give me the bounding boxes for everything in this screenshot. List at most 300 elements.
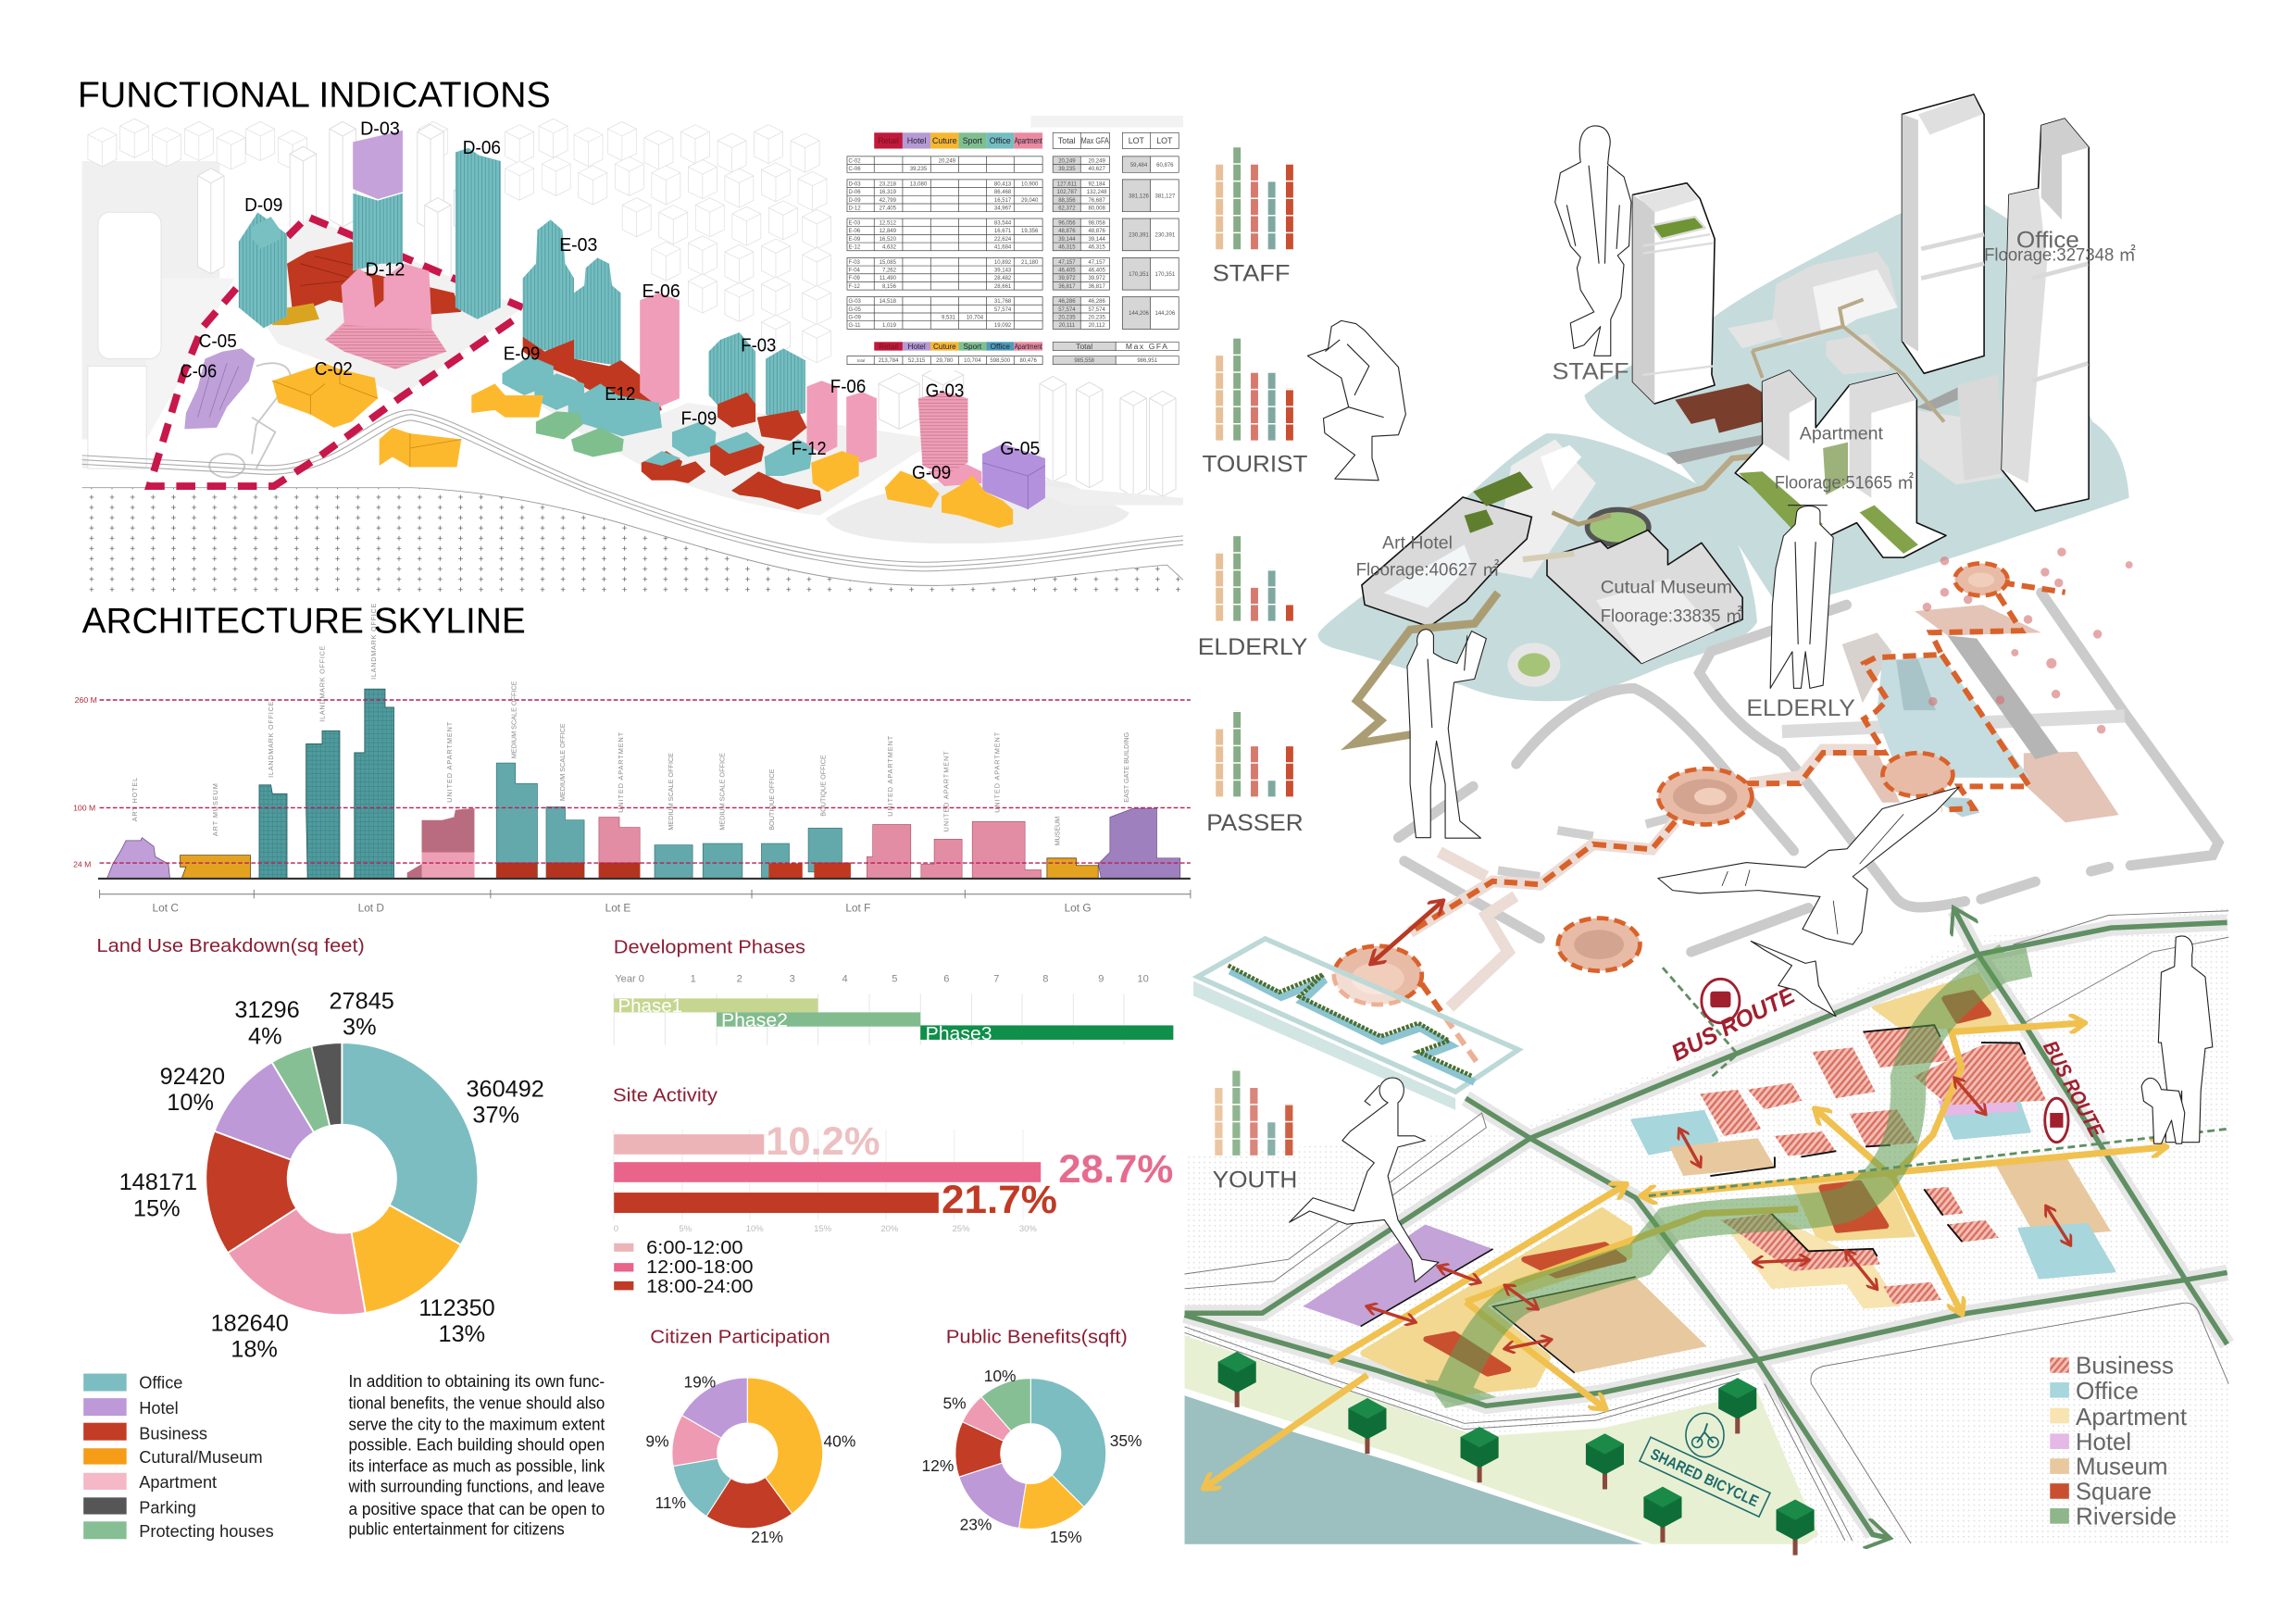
table values: 39,972 [1088,276,1105,281]
massing lot C [184,348,461,468]
legend: land use: Parking [139,1499,196,1518]
table values: D-09 [849,198,861,204]
table values: 23,218 [880,181,897,187]
table values: 19,092 [994,323,1012,329]
heading: land use: Land Use Breakdown(sq feet) [96,935,365,956]
height labels: 100 M [73,803,95,812]
massing lot F [642,332,877,509]
donut chart: citizen participation [672,1378,823,1529]
legend: site plan: Riverside [2076,1502,2177,1530]
table totals: 80,476 [1019,358,1037,364]
year axis labels: 3 [790,973,795,984]
table values: 46,286 [1058,299,1076,305]
dashed bus line [1649,968,2227,1196]
table values: 27,405 [880,206,897,211]
building type vertical labels: BOUTIQUE OFFICE [767,768,776,831]
table totals: Sport [964,343,982,351]
year axis labels: 4 [842,973,848,984]
building: art hotel [1362,439,1596,627]
table values: 10,704 [967,315,984,320]
public benefit percentages: 35% [1110,1431,1142,1450]
panel: development phases [614,937,1173,1044]
table totals: 10,704 [964,358,981,364]
table totals: Apartment [1015,343,1042,351]
gantt bars [614,993,1173,1044]
building code labels: F-12 [792,438,827,459]
green flow arrow [1425,948,2032,1408]
donut values: 31296 [234,997,300,1023]
building type vertical labels: MEDIUM SCALE OFFICE [667,753,675,831]
building code labels: E12 [605,383,635,405]
table values: 48,876 [1088,229,1105,234]
building type vertical labels: MEDIUM SCALE OFFICE [510,681,518,758]
table totals: 29,780 [936,358,954,364]
donut values: 18% [231,1336,278,1362]
building type vertical labels: ILANDMARK OFFICE [267,701,275,778]
table values: 20,249 [1088,158,1105,164]
route nodes [1334,563,2007,1005]
year axis labels: 9 [1098,973,1104,984]
legend: site plan: Hotel [2076,1428,2131,1455]
bar chart: activity by time: 10.2% [766,1119,880,1164]
table values: F-03 [849,260,861,266]
plots: yellow plaza [1364,1211,1628,1393]
legend: site plan: Business [2076,1352,2174,1380]
gantt bars: Phase3 [926,1023,992,1044]
annotations: building floorage labels: Apartment [1800,424,1884,443]
building type vertical labels: UNITED APARTMENT [942,751,950,831]
donut values: 10% [167,1090,214,1116]
table values: 59,484 [1130,163,1148,169]
red activity dots [1923,548,2133,733]
legend: site plan: Museum [2076,1453,2168,1480]
table values: 92,184 [1088,181,1105,187]
building type vertical labels: MEDIUM SCALE OFFICE [718,753,726,831]
bar chart: activity by time: 28.7% [1058,1147,1173,1192]
building code labels: E-03 [559,234,597,256]
text block: venue description [348,1372,605,1539]
bar chart: activity by time: 15% [814,1224,832,1234]
building type vertical labels: ILANDMARK OFFICE [369,603,378,680]
table values: 12,849 [880,229,897,234]
label: elderly: ELDERLY [1198,634,1308,660]
city context buildings [88,119,1176,496]
table values: E-03 [849,220,861,226]
building type vertical labels: UNITED APARTMENT [445,721,454,803]
table totals: 598,500 [990,358,1011,364]
heading: site activity: Site Activity [613,1084,718,1106]
table values: 46,405 [1088,269,1105,274]
text block: venue description: its interface as much as possible, link [348,1457,605,1476]
table values: C-06 [849,167,861,172]
bus route label and sign: BUS ROUTE [1667,982,1800,1067]
table values: 102,787 [1057,190,1078,195]
grey streets [1398,593,2218,952]
table values: 127,611 [1057,181,1078,187]
table totals: total [857,358,865,363]
table values: 230,391 [1154,232,1176,238]
panel: citizen participation [645,1326,855,1546]
annotations: building floorage labels [1356,227,2136,721]
legend: time slots: 18:00-24:00 [646,1276,754,1297]
figure: staff man [1555,126,1631,356]
figure: runner [1290,1078,1439,1282]
table values: 20,249 [939,158,956,164]
table values: F-09 [849,276,861,281]
table totals: Office [991,343,1010,351]
table totals [847,342,1179,365]
table values: 86,468 [994,190,1012,195]
table header row: Apartment [1015,136,1042,145]
donut values [119,989,544,1362]
lot labels: Lot D [358,902,384,915]
table values: 381,126 [1129,194,1150,200]
legend: land use: Hotel [139,1399,179,1418]
donut values: 148171 [119,1169,197,1195]
site boundary dashed line [149,217,523,486]
public benefit percentages: 23% [960,1515,992,1533]
table header row: Sport [963,136,982,145]
courtyard complex [1842,605,2119,822]
legend: land use: Business [139,1425,207,1443]
building code labels: D-12 [366,258,405,280]
table values: 80,008 [1088,206,1105,211]
tower: east office tower [2002,119,2089,511]
legend: time slots: 6:00-12:00 [646,1237,743,1258]
table values: 20,249 [1058,158,1076,164]
park strip [1185,1335,1818,1544]
table totals: Max GFA [1126,342,1169,351]
building code labels: E-09 [504,343,540,364]
bar chart: activity by time: 20% [880,1224,899,1234]
donut values: 37% [472,1102,519,1128]
dashed orange route [1398,580,2065,1065]
table values: 42,799 [880,198,897,204]
round stage [1587,509,1649,544]
building type vertical labels: ART HOTEL [131,778,139,821]
figure: large seagull [1658,787,1959,944]
citizen percentages: 11% [655,1493,686,1512]
building code labels: G-03 [926,381,964,402]
lot labels: Lot F [845,902,870,915]
table values: 1,019 [882,323,897,329]
heading: public benefits: Public Benefits(sqft) [946,1326,1128,1347]
donut values: 13% [439,1321,485,1347]
plots: purple hotel [1303,1225,1493,1327]
red double arrow [1372,901,1442,963]
building code labels: D-09 [244,194,282,216]
text block: venue description: a positive space that can be open to [348,1500,605,1518]
table values: 39,972 [1058,276,1076,281]
bars: staff [1219,146,1290,249]
building code labels [181,119,1040,483]
year axis labels [615,973,1149,984]
donut values: 3% [343,1014,377,1040]
table grid [847,156,1179,329]
public benefit percentages: 10% [984,1367,1016,1385]
year axis labels: 7 [993,973,999,984]
table totals: 986,951 [1137,358,1158,364]
table header row: Total [1058,136,1076,145]
table totals: Total [1076,342,1092,351]
round planter [1507,643,1560,687]
table values: 62,372 [1058,206,1076,211]
year axis labels: 8 [1042,973,1048,984]
table values: F-12 [849,284,861,290]
table values: 144,206 [1129,311,1150,317]
table values: 48,876 [1058,229,1076,234]
table values: 132,248 [1087,190,1107,195]
table header row: Retail [878,136,899,145]
table values: 28,661 [994,284,1012,290]
building code labels: C-05 [199,331,237,352]
year axis labels: Year 0 [615,973,644,984]
shared bicycle sign [1640,1413,1770,1517]
table values: 29,040 [1021,198,1039,204]
table values: G-11 [849,323,861,329]
panel: land use breakdown [83,935,605,1541]
table values: 7,262 [882,269,897,274]
massing lot E [471,219,680,456]
thin block outlines and rail lines [1185,911,2228,1543]
table values: 46,405 [1058,269,1076,274]
table values: 381,127 [1154,194,1176,200]
lot axis [100,890,1191,898]
legend: land use: Cutural/Museum [139,1448,263,1467]
table totals: 213,784 [879,358,899,364]
donut chart: public benefits [955,1379,1106,1530]
grey bridge strips [1498,815,1681,877]
table values: C-02 [849,158,861,164]
building code labels: E-06 [643,281,680,302]
year axis labels: 10 [1137,973,1149,984]
donut values: 4% [248,1024,282,1050]
bars: elderly [1219,535,1290,621]
table values [849,158,1176,329]
table values: E-06 [849,229,861,234]
bar chart: activity by time [614,1119,1173,1234]
building code labels: D-06 [463,137,501,158]
gantt bars: Phase2 [721,1009,788,1031]
heading: citizen participation: Citizen Participation [650,1326,830,1347]
height labels: 24 M [73,859,91,868]
building type vertical labels: ILANDMARK OFFICE [318,645,327,722]
red double arrows [1367,1079,2070,1349]
table values: 170,351 [1154,272,1176,278]
legend: land use [83,1373,274,1541]
table values: D-12 [849,206,861,211]
bars: tourist [1219,337,1290,441]
table values: 16,517 [994,198,1012,204]
table values: D-06 [849,190,861,195]
table values: 76,687 [1088,198,1105,204]
public benefit percentages: 15% [1050,1528,1082,1546]
table values: 57,574 [994,307,1012,313]
river [1185,1395,1642,1544]
massing lot D [239,131,501,369]
table values: 34,967 [994,206,1012,211]
building type vertical labels: UNITED APARTMENT [993,731,1002,813]
table values: 98,058 [1088,220,1105,226]
bar chart: activity by time: 5% [679,1224,693,1234]
table values: 16,319 [880,190,897,195]
building type vertical labels: UNITED APARTMENT [617,731,625,813]
table totals: Retail [879,343,898,351]
citizen percentages: 9% [645,1432,669,1451]
panel: functional massing map [82,118,1183,593]
table values: 96,056 [1058,220,1076,226]
annotations: building floorage labels: Cutual Museum [1601,578,1732,598]
table values: 57,574 [1058,307,1076,313]
table values: 10,900 [1021,181,1039,187]
bar chart: activity by time: 10% [746,1224,764,1234]
table values: G-03 [849,299,862,305]
figure: elderly man [1770,506,1833,688]
annotations: building floorage labels: Floorage:33835 ㎡ [1601,605,1742,626]
table values: 46,286 [1088,299,1105,305]
table values: 10,892 [994,260,1012,266]
building type vertical labels [131,603,1130,845]
table values: 144,206 [1154,311,1176,317]
table values: 21,180 [1021,260,1039,266]
table values: 16,520 [880,237,897,243]
table values: 14,518 [880,299,897,305]
table values: E-12 [849,245,861,251]
figure: woman taking photo [1407,630,1486,838]
height labels: 260 M [75,695,97,705]
bars: passer [1219,710,1290,796]
building type vertical labels: MUSEUM [1053,817,1061,845]
trees [1218,1352,1815,1555]
walkway loop near lot C [209,363,291,478]
label: staff: STAFF [1213,261,1290,287]
tower: centre office tower [1903,94,1984,373]
teal site plates [1317,191,2129,701]
citizen percentages: 19% [683,1373,716,1392]
table values: 31,768 [994,299,1012,305]
legend: land use: Apartment [139,1473,217,1492]
building: cultural museum [1547,531,1742,663]
year axis labels: 2 [737,973,742,984]
building code labels: F-03 [741,335,776,356]
legend: site plan [2050,1352,2188,1530]
grey low-rise podium blocks [1728,252,2004,485]
text block: venue description: possible. Each building should open [348,1436,605,1455]
panel: architecture skyline [73,601,1191,915]
title: functional indications: FUNCTIONAL INDICATIONS [78,75,551,115]
figure: small seagull [1751,941,1836,1017]
year axis labels: 5 [892,973,897,984]
plots: museum lot [1493,1277,1707,1373]
tower: staff west tower [1633,183,1715,404]
public benefit percentages: 12% [921,1456,954,1475]
table values: E-09 [849,237,861,243]
road strips and brown building [1621,299,1958,513]
table header row: Hotel [907,136,926,145]
donut values: 112350 [418,1295,495,1321]
table values: 46,315 [1088,245,1105,251]
pale walkway bands [1410,750,1878,1007]
panel: site activity [613,1084,1173,1297]
legend: site plan: Office [2076,1377,2139,1405]
label: tourist: TOURIST [1203,451,1307,477]
ground line [98,878,1191,880]
table values: 9,531 [942,315,956,320]
table values: 13,080 [910,181,928,187]
gantt bars: Phase1 [618,995,682,1017]
annotations: building floorage labels: Office [2016,227,2079,253]
table header row: LOT [1156,136,1173,145]
bar chart: activity by time: 0 [614,1224,618,1234]
table values: 39,144 [1058,237,1076,243]
legend: site plan: Apartment [2076,1403,2188,1430]
table values: 39,235 [910,167,928,172]
legend: time slots [614,1237,754,1297]
table totals: 985,558 [1074,358,1095,364]
citizen percentages: 21% [751,1528,783,1546]
building code labels: F-09 [680,408,717,430]
year axis labels: 6 [943,973,949,984]
annotations: building floorage labels: Art Hotel [1382,533,1453,553]
heading: development phases: Development Phases [614,937,805,958]
table values: 60,876 [1156,163,1174,169]
building type vertical labels: EAST GATE BUILDING [1122,731,1130,803]
text block: venue description: tional benefits, the venue should also [348,1394,605,1413]
table header row: Office [990,136,1011,145]
bus route label east: BUS ROUTE [2039,1037,2109,1142]
table values: 88,356 [1058,198,1076,204]
legend: land use: Office [139,1373,182,1392]
table values: 20,112 [1089,323,1105,329]
plots: office and museum blocks [1632,1096,2115,1308]
table values: G-09 [849,315,862,320]
text block: venue description: In addition to obtaining its own func- [348,1372,605,1391]
table values: 36,817 [1058,284,1076,290]
lot labels: Lot G [1065,902,1092,915]
building: apartment complex [1735,370,1946,557]
text block: venue description: public entertainment for citizens [348,1520,565,1539]
text block: venue description: with surrounding functions, and leave [348,1478,605,1496]
lot labels [153,902,1092,915]
table header row: LOT [1129,136,1145,145]
public benefit percentages [921,1367,1142,1546]
donut values: 360492 [466,1077,544,1103]
table values: 4,632 [882,245,897,251]
panel: isometric building massing [1317,94,2129,743]
donut values: 92420 [160,1064,225,1090]
table values: 19,356 [1021,229,1039,234]
table values: 83,544 [994,220,1012,226]
annotations: building floorage labels: Floorage:51665 ㎡ [1775,471,1914,493]
heading: architecture skyline: ARCHITECTURE SKYLINE [82,601,526,641]
building type vertical labels: MEDIUM SCALE OFFICE [558,723,567,801]
tan connector paths [1354,513,1611,743]
bar chart: activity by time: 25% [953,1224,970,1234]
panel: user group bar icons [1198,146,1308,1193]
label: passer: PASSER [1206,810,1304,836]
table values: 46,315 [1058,245,1076,251]
table values: 39,143 [994,269,1012,274]
bars: youth [1218,1069,1289,1156]
building code labels: G-09 [912,462,951,483]
plots: squares [1427,974,2009,1374]
table values: D-03 [849,181,861,187]
table totals: Hotel [908,343,926,351]
table values: 40,627 [1088,167,1105,172]
table values: F-04 [849,269,861,274]
road underlay [1185,910,2227,1535]
table values: 57,574 [1088,307,1105,313]
